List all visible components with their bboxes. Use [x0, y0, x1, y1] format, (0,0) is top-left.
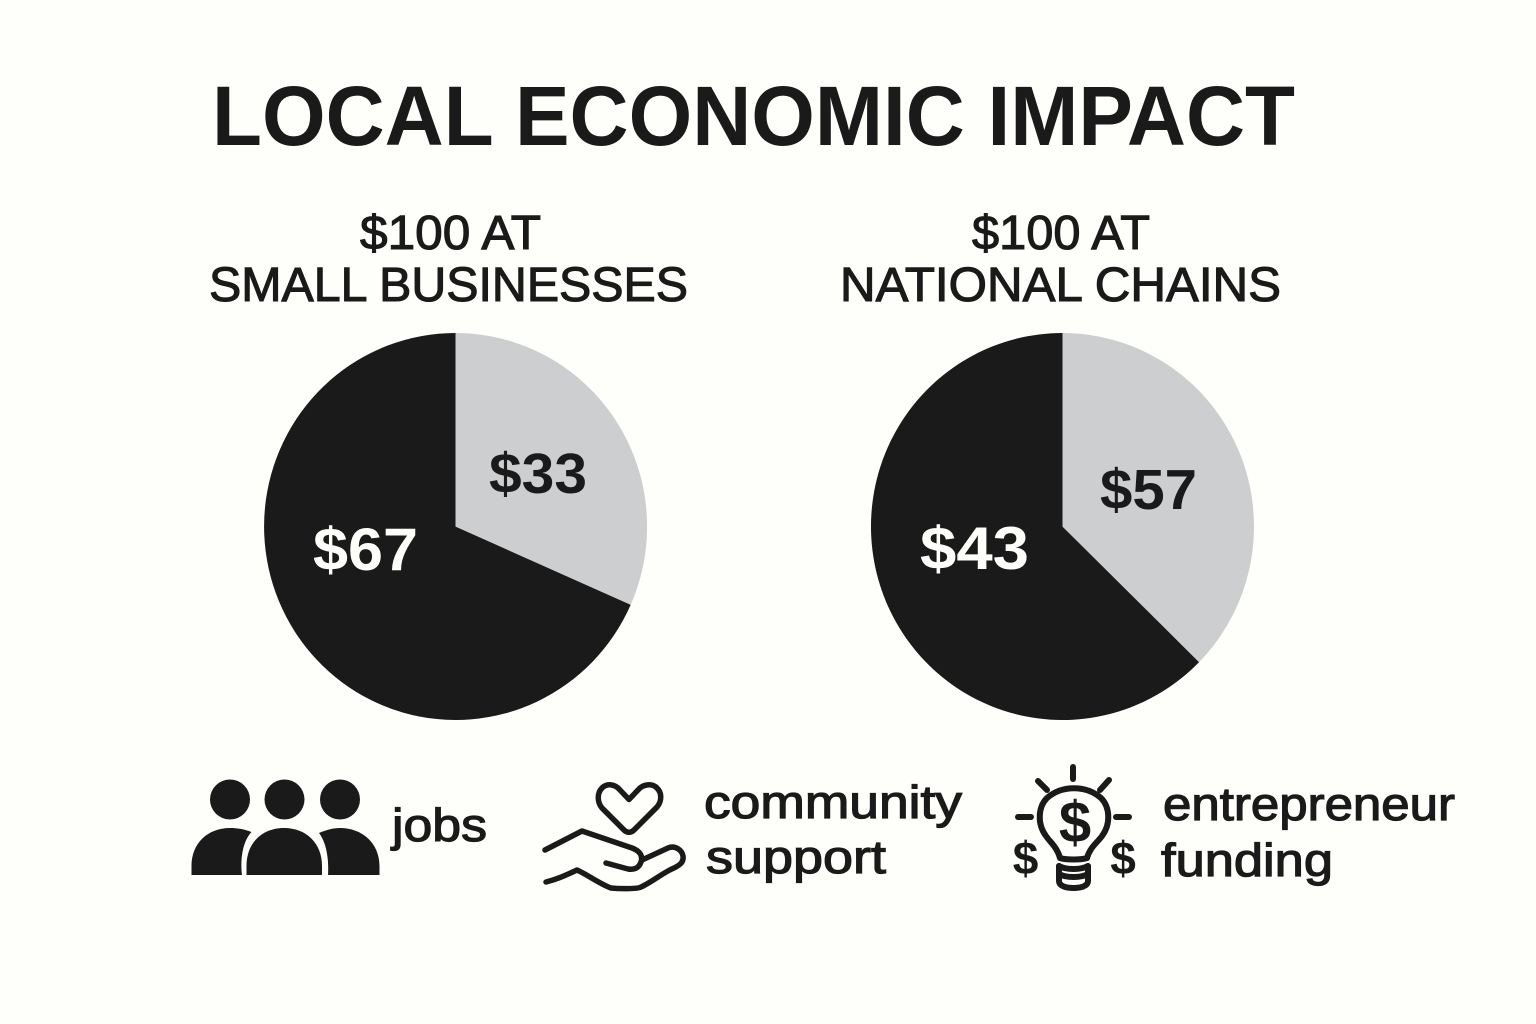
pie chart: national chains: $43 — [920, 515, 1029, 582]
heading: small businesses: SMALL BUSINESSES — [209, 259, 688, 312]
icon: hand holding heart — [545, 785, 683, 889]
heading: national chains: NATIONAL CHAINS — [840, 259, 1281, 312]
pie chart: national chains: $57 — [1100, 458, 1197, 522]
title: LOCAL ECONOMIC IMPACT — [212, 69, 1295, 163]
label: entrepreneur funding: funding — [1161, 834, 1333, 886]
icon: light bulb with dollars — [1013, 767, 1136, 888]
heading: national chains — [840, 207, 1281, 312]
pie chart: national chains — [871, 333, 1254, 720]
label: community support — [704, 776, 962, 883]
pie chart: small businesses — [264, 333, 647, 720]
panel: small businesses — [209, 207, 688, 720]
label: jobs: jobs — [390, 799, 487, 851]
heading: small businesses — [209, 207, 688, 312]
label: entrepreneur funding — [1161, 778, 1455, 886]
icon: people — [192, 780, 380, 875]
icon: light bulb with dollars: $ — [1110, 832, 1136, 884]
heading: national chains: $100 AT — [972, 207, 1150, 260]
label: community support: community — [704, 776, 962, 828]
pie chart: small businesses: $67 — [313, 516, 418, 583]
pie chart: small businesses: $33 — [489, 442, 587, 506]
icon: light bulb with dollars: $ — [1013, 832, 1038, 884]
icon: light bulb with dollars: $ — [1059, 790, 1091, 855]
label: community support: support — [706, 831, 886, 883]
label: entrepreneur funding: entrepreneur — [1163, 778, 1455, 830]
panel: national chains — [840, 207, 1281, 720]
heading: small businesses: $100 AT — [360, 207, 541, 260]
